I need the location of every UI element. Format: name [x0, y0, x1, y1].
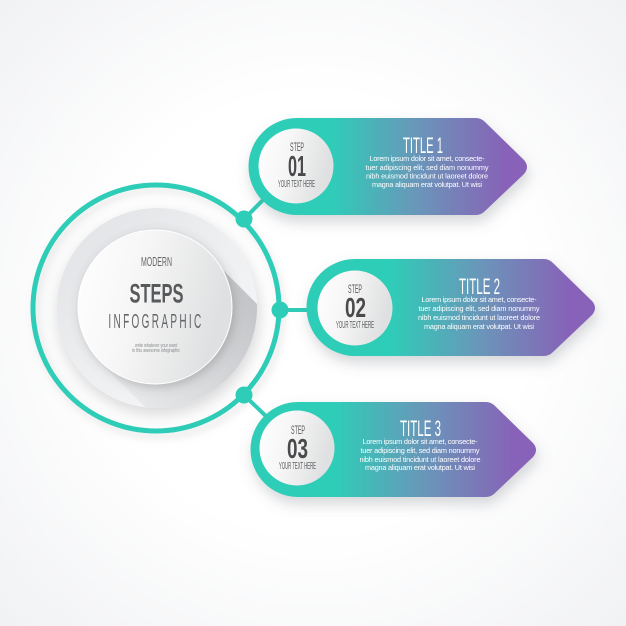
white circle	[78, 230, 232, 384]
arrow banner	[248, 118, 527, 215]
panel: step 1: STEP	[290, 140, 304, 154]
long shadow	[116, 270, 257, 408]
white badge	[318, 270, 392, 346]
small note: in this awesome infographic	[132, 348, 180, 354]
connector: step 1	[244, 193, 270, 219]
nodes	[236, 210, 288, 404]
body text: tuer adipiscing elit, sed diam nonummy	[418, 304, 540, 313]
title: TITLE 1	[403, 133, 443, 158]
title: TITLE 2	[459, 274, 500, 299]
outer ring	[33, 185, 279, 431]
panel: step 2: STEP	[348, 282, 362, 296]
body text	[418, 295, 540, 331]
small note: write whatever your want	[135, 343, 177, 349]
body text: Lorem ipsum dolor sit amet, consecte-	[370, 154, 485, 163]
node 1	[236, 210, 252, 228]
central disc	[53, 208, 265, 420]
small note	[132, 343, 180, 354]
body text: Lorem ipsum dolor sit amet, consecte-	[362, 437, 478, 446]
panel: step 3	[251, 402, 536, 497]
connectors and central ring	[33, 185, 315, 431]
steps title: STEPS	[130, 278, 184, 308]
body text: magna aliquam erat volutpat. Ut wisi	[365, 463, 475, 472]
modern label: MODERN	[141, 254, 172, 269]
panel: step 3: YOUR TEXT HERE	[279, 461, 316, 472]
step number: 02	[345, 292, 366, 323]
white badge	[258, 128, 334, 204]
arrow banner	[251, 402, 536, 497]
title: TITLE 3	[400, 416, 441, 441]
body text: nibh euismod tincidunt ut laoreet dolore	[360, 455, 480, 464]
panel: step 2	[306, 259, 595, 356]
node 2	[272, 302, 288, 318]
panel: step 1	[248, 118, 527, 215]
step number: 03	[287, 433, 308, 464]
panel: step 1: YOUR TEXT HERE	[278, 179, 315, 190]
node 3	[236, 386, 252, 404]
panel: step 3: STEP	[291, 423, 305, 437]
body text: tuer adipiscing elit, sed diam nonummy	[360, 446, 480, 455]
panel: step 2: YOUR TEXT HERE	[336, 320, 374, 331]
body text	[360, 437, 480, 472]
white badge	[260, 410, 334, 486]
connector: step 3	[244, 395, 272, 422]
infographic subtitle: INFOGRAPHIC	[108, 312, 204, 333]
body text: nibh euismod tincidunt ut laoreet dolore	[366, 172, 488, 180]
central heading	[108, 254, 204, 354]
body text: tuer adipiscing elit, sed diam nonummy	[366, 163, 489, 172]
arrow banner	[306, 259, 595, 356]
body text	[366, 154, 489, 189]
body text: magna aliquam erat volutpat. Ut wisi	[372, 180, 482, 189]
body text: Lorem ipsum dolor sit amet, consecte-	[422, 295, 537, 304]
connector: step 2	[280, 308, 315, 312]
step number: 01	[288, 151, 306, 183]
body text: nibh euismod tincidunt ut laoreet dolore	[418, 313, 540, 322]
disc base	[57, 208, 257, 408]
body text: magna aliquam erat volutpat. Ut wisi	[424, 322, 534, 331]
